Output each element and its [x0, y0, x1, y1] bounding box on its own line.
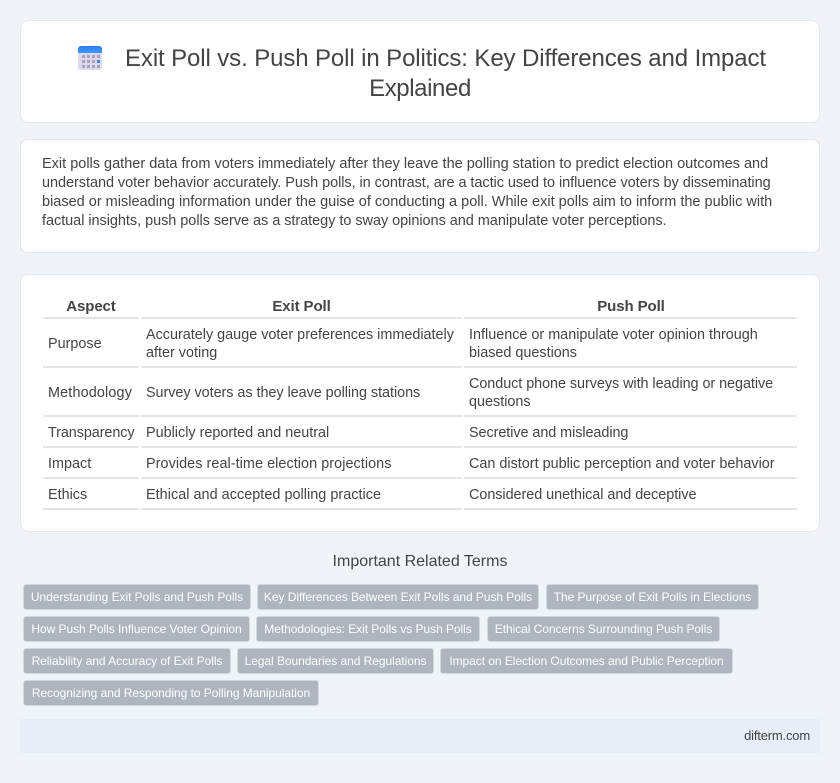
table header: Exit Poll	[272, 298, 331, 315]
footer site name: difterm.com	[744, 728, 810, 743]
footer bar	[20, 719, 820, 753]
row: methodology: Methodology	[48, 385, 132, 401]
row: transparency: Transparency	[48, 425, 134, 441]
row: purpose: Influence or manipulate voter opinion through	[469, 327, 758, 343]
row: purpose: biased questions	[469, 345, 577, 361]
row: purpose: Accurately gauge voter preferences immediately	[146, 327, 454, 343]
related terms tags: Recognizing and Responding to Polling Manipulation	[32, 686, 310, 700]
row: transparency: Publicly reported and neutral	[146, 425, 329, 441]
title	[125, 45, 766, 102]
related terms heading: Important Related Terms	[333, 553, 507, 570]
related terms tags: Key Differences Between Exit Polls and Push Polls	[264, 590, 532, 604]
row: methodology	[48, 376, 773, 410]
title: Explained	[369, 75, 471, 102]
row: transparency: Secretive and misleading	[469, 425, 628, 441]
header panel	[20, 20, 820, 123]
row: ethics: Ethical and accepted polling practice	[146, 487, 381, 503]
related terms tags: Ethical Concerns Surrounding Push Polls	[495, 622, 712, 636]
row: impact: Impact	[48, 456, 91, 472]
table header	[66, 298, 665, 315]
comparison table panel	[20, 274, 820, 532]
intro paragraph: Exit polls gather data from voters immediately after they leave the polling station to predict election outcomes and	[42, 156, 768, 172]
related terms tags: Impact on Election Outcomes and Public Perception	[449, 654, 724, 668]
related terms tags: Methodologies: Exit Polls vs Push Polls	[264, 622, 472, 636]
related terms tags: Reliability and Accuracy of Exit Polls	[32, 654, 222, 668]
row: ethics: Considered unethical and deceptive	[469, 487, 696, 503]
table header: Aspect	[66, 298, 116, 315]
row: purpose: after voting	[146, 345, 217, 361]
related terms tags: The Purpose of Exit Polls in Elections	[554, 590, 751, 604]
related terms tags: Legal Boundaries and Regulations	[245, 654, 426, 668]
row: methodology: questions	[469, 394, 531, 410]
title: Exit Poll vs. Push Poll in Politics: Key Differences and Impact	[125, 45, 766, 72]
related terms tags: How Push Polls Influence Voter Opinion	[31, 622, 242, 636]
row: methodology: Conduct phone surveys with leading or negative	[469, 376, 773, 392]
row: methodology: Survey voters as they leave polling stations	[146, 385, 420, 401]
icon: calendar	[78, 46, 102, 70]
row: ethics: Ethics	[48, 487, 87, 503]
row: impact: Can distort public perception and voter behavior	[469, 456, 775, 472]
intro paragraph: biased or misleading information under the guise of conducting a poll. While exit polls aim to inform the public with	[42, 194, 772, 210]
row: purpose: Purpose	[48, 336, 102, 352]
row: transparency	[48, 425, 628, 441]
row: impact	[48, 456, 775, 472]
row: purpose	[48, 327, 758, 361]
related terms tags	[23, 584, 759, 706]
intro paragraph	[42, 156, 772, 229]
table header: Push Poll	[597, 298, 665, 315]
row: impact: Provides real-time election projections	[146, 456, 392, 472]
intro paragraph: understand voter behavior accurately. Push polls, in contrast, are a tactic used to influence voters by disseminating	[42, 175, 771, 191]
row: ethics	[48, 487, 696, 503]
intro paragraph: factual insights, push polls serve as a strategy to sway opinions and manipulate voter perceptions.	[42, 213, 667, 229]
intro text panel	[20, 139, 820, 253]
related terms tags: Understanding Exit Polls and Push Polls	[31, 590, 243, 604]
